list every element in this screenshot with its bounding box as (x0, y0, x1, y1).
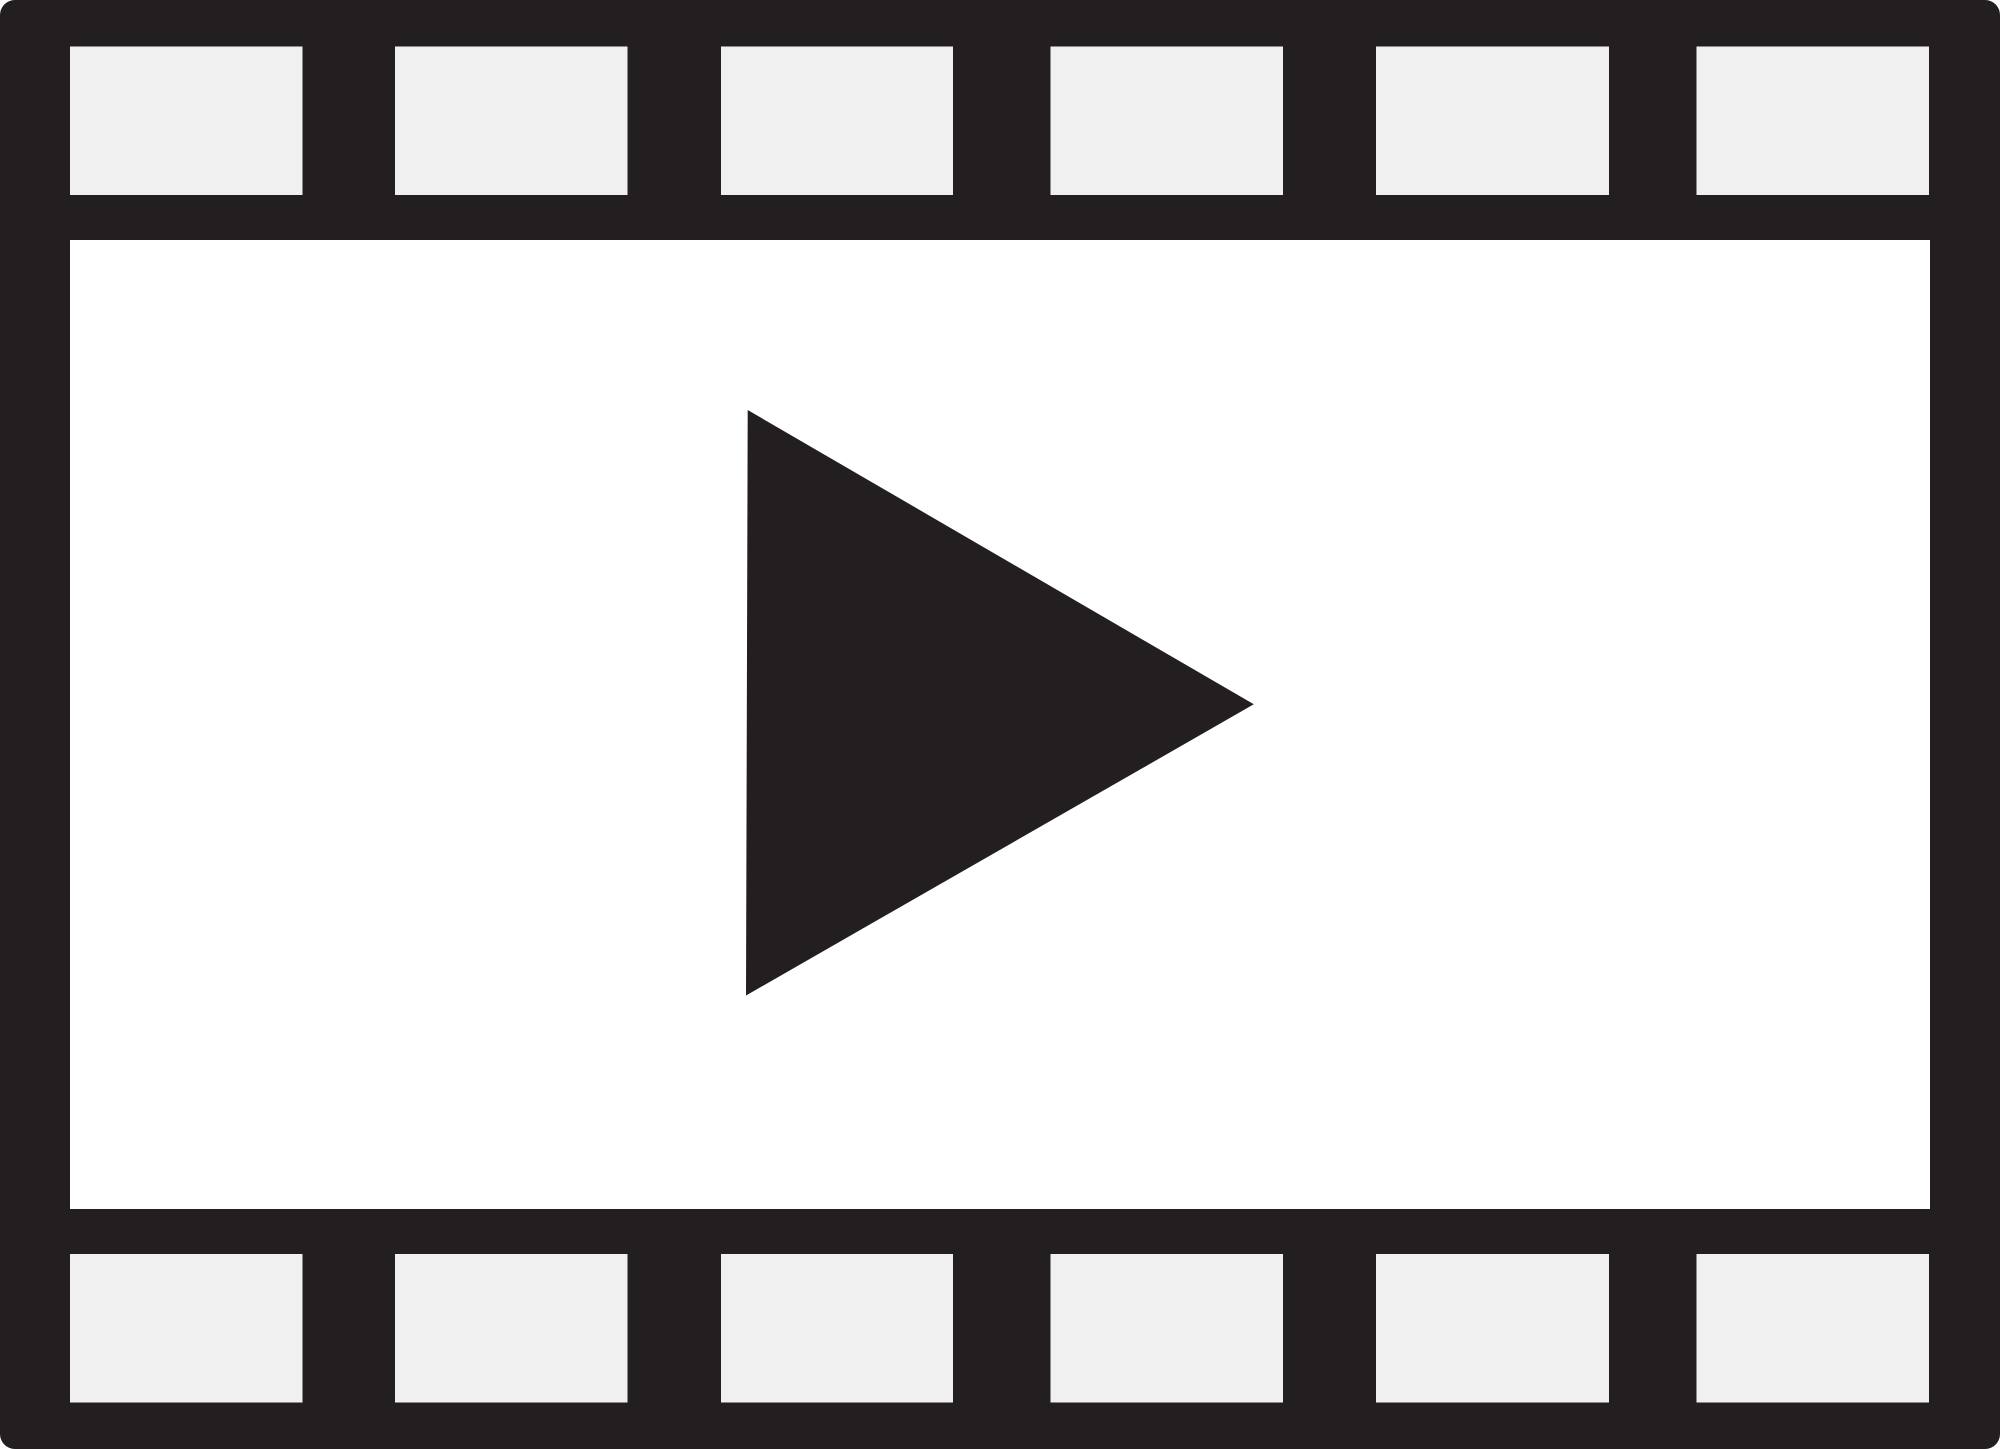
bottom row of sprocket holes (70, 1254, 1929, 1402)
icon: play triangle (746, 410, 1254, 996)
top row of sprocket holes (70, 46, 1929, 195)
central video screen (70, 240, 1930, 1209)
